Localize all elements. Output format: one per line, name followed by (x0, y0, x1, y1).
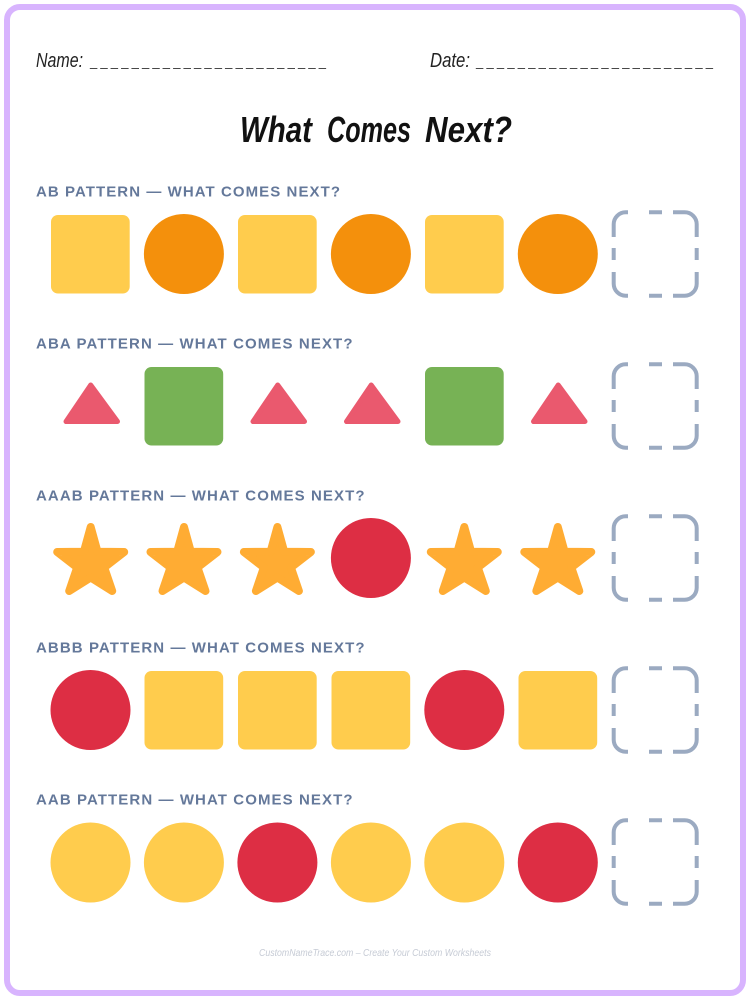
title: Comes (327, 109, 411, 150)
label: AB pattern: AB PATTERN — WHAT COMES NEXT? (36, 184, 340, 200)
name and date fields: Date: (430, 50, 470, 72)
name and date fields: _______________________ (89, 54, 327, 70)
shapes: AAAB sequence (57, 518, 591, 598)
answer box (614, 212, 697, 296)
row: ABA pattern (36, 336, 697, 448)
label: AAB pattern: AAB PATTERN — WHAT COMES NEXT? (36, 792, 352, 808)
label: ABA pattern: ABA PATTERN — WHAT COMES NEXT? (36, 336, 352, 352)
name and date fields: Name: (36, 50, 83, 72)
shapes: AB sequence (51, 214, 598, 294)
answer box (614, 516, 697, 600)
row: ABBB pattern (36, 640, 697, 752)
label: ABBB pattern: ABBB PATTERN — WHAT COMES NEXT? (36, 640, 364, 656)
label: AAAB pattern: AAAB PATTERN — WHAT COMES NEXT? (36, 488, 364, 504)
shapes: ABBB sequence (50, 670, 597, 750)
footer: CustomNameTrace.com – Create Your Custom Worksheets (259, 948, 491, 959)
row: AAAB pattern (36, 488, 697, 600)
title: What (240, 109, 314, 150)
row: AAB pattern (36, 792, 697, 904)
row: AB pattern (36, 184, 697, 296)
title: Next? (425, 109, 512, 150)
answer box (614, 820, 697, 904)
shapes: AAB sequence (50, 822, 598, 902)
answer box (614, 364, 697, 448)
name and date fields (36, 50, 714, 72)
name and date fields: _______________________ (475, 54, 714, 70)
shapes: ABA sequence (66, 367, 585, 446)
answer box (614, 668, 697, 752)
